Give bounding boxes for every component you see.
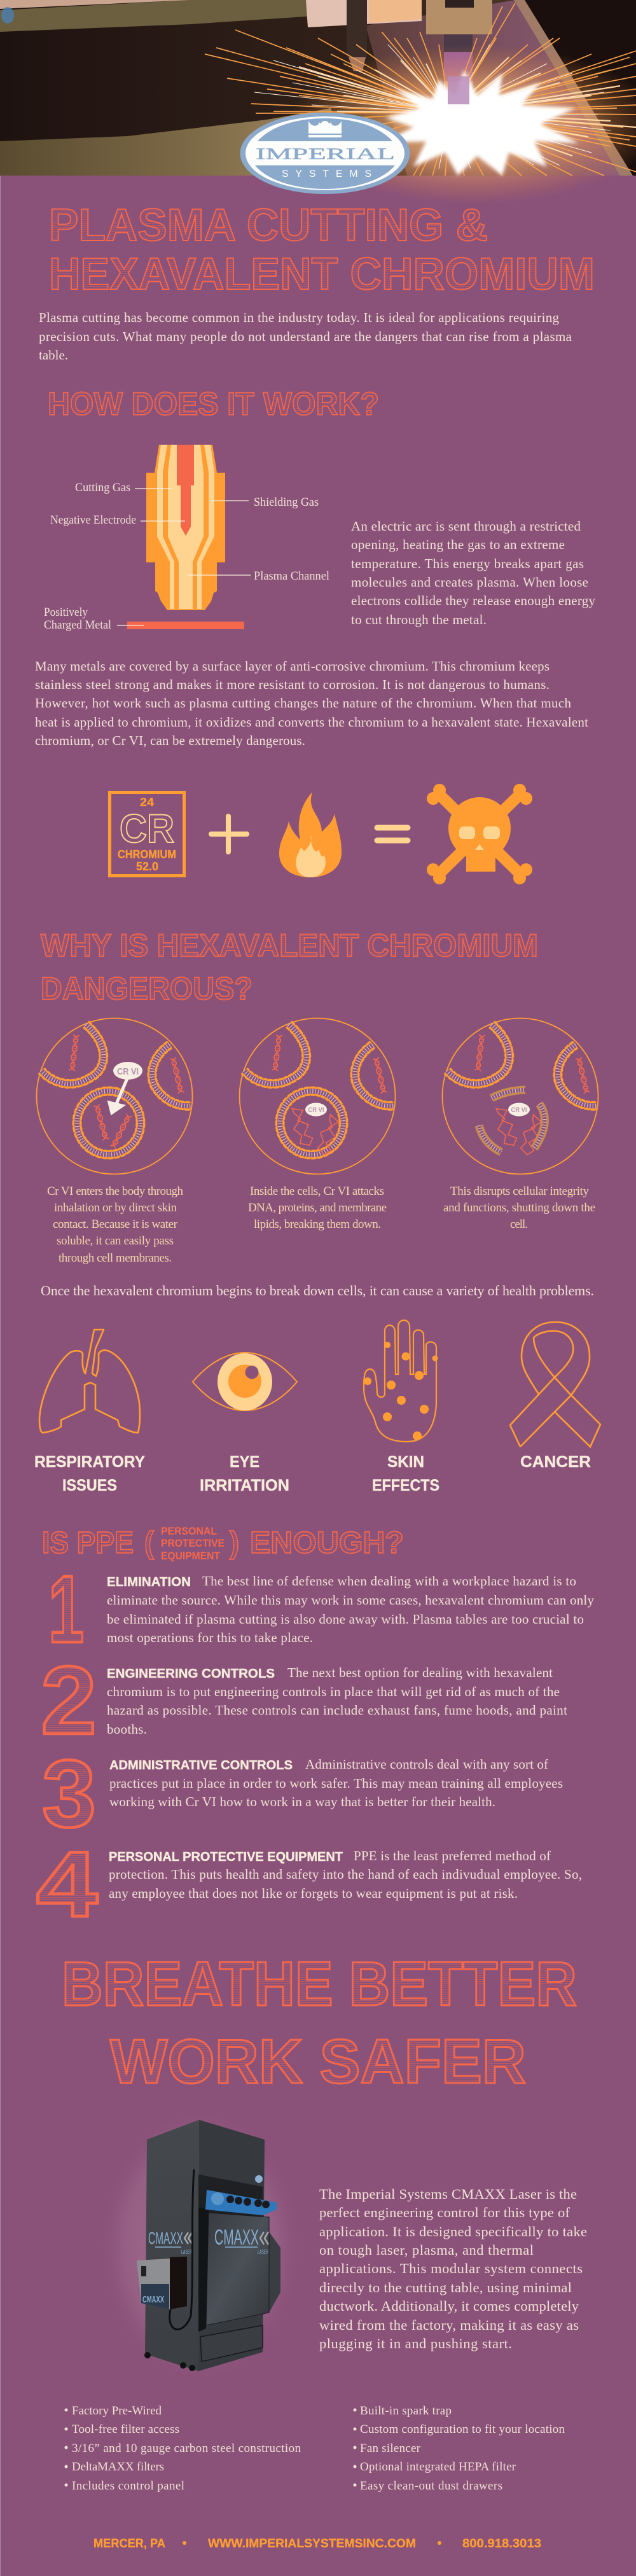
caption: step 3 [443, 1185, 595, 1231]
diagram: Cr VI enters cell [37, 1018, 192, 1174]
text block: personal protective equipment [109, 1848, 582, 1901]
label: respiratory issues: ISSUES [62, 1477, 117, 1494]
Cr VI bubble [113, 1062, 142, 1080]
nozzle labels [44, 481, 329, 632]
label: eye irritation [200, 1453, 289, 1494]
arrow [109, 1077, 128, 1113]
list: features right: Built-in spark trap [360, 2404, 452, 2418]
Cr VI bubble: CR VI [117, 1066, 139, 1077]
text block: CMAXX description: perfect engineering control for this type of [319, 2204, 570, 2220]
icon: chromium periodic table tile: 52.0 [136, 860, 158, 873]
broken membrane fragments [479, 1090, 544, 1152]
text block: intro: precision cuts. What many people do not understand are the dangers that can rise from a plasma [39, 329, 572, 344]
text block: how plasma works: temperature. This energy breaks apart gas [351, 556, 584, 571]
icon: hand with rash [364, 1320, 438, 1442]
text block: CMAXX description: application. It is designed specifically to take [319, 2224, 587, 2239]
text block: chromium: However, hot work such as plasma cutting changes the nature of the chromium. When that much [35, 695, 571, 711]
text block: engineering controls: ENGINEERING CONTROLS [107, 1667, 275, 1681]
Cr VI bubble [508, 1103, 530, 1116]
icon: cancer ribbon [510, 1322, 600, 1447]
headline: breathe better work safer: BREATHE BETTER [62, 1949, 577, 2019]
text block: elimination: be eliminated if plasma cutting is also done away with. Plasma tables are too crucial to [107, 1612, 584, 1627]
heading: is PPE enough: PERSONAL [161, 1525, 217, 1537]
product: CMAXX Laser machine [99, 2109, 302, 2383]
title: PLASMA CUTTING & [49, 200, 488, 251]
electrode [177, 445, 194, 536]
headline: breathe better work safer: WORK SAFER [110, 2026, 526, 2096]
text block: administrative controls: working with Cr VI how to work in a way that is better for their health. [109, 1794, 495, 1809]
text block: personal protective equipment: PPE is the least preferred method of [354, 1848, 551, 1863]
icon: equals [377, 828, 408, 840]
caption: step 1: Cr VI enters the body through [47, 1185, 183, 1198]
number 1: 1 [48, 1556, 84, 1662]
text block: CMAXX description: wired from the factory, making it as easy as [319, 2317, 579, 2333]
nozzle labels: Plasma Channel [254, 569, 329, 583]
heading: is PPE enough: ENOUGH? [250, 1526, 404, 1560]
heading: why dangerous [41, 928, 538, 1006]
title: HEXAVALENT CHROMIUM [49, 249, 595, 300]
label: eye irritation: EYE [230, 1453, 259, 1471]
caption: step 1: soluble, it can easily pass [57, 1234, 174, 1248]
list: features right: Easy clean-out dust drawers [360, 2479, 502, 2493]
text block: CMAXX description [319, 2186, 587, 2351]
text block: engineering controls: hazard as possible. These controls can include exhaust fans, fume hoods, and paint [107, 1702, 567, 1718]
title [49, 200, 595, 300]
text block: elimination: eliminate the source. While this may work in some cases, hexavalent chromium can only [107, 1592, 594, 1608]
list: features left: Tool-free filter access [72, 2423, 179, 2436]
text block: intro: Plasma cutting has become common in the industry today. It is ideal for applications requiring [39, 310, 560, 325]
text block: chromium: heat is applied to chromium, it oxidizes and converts the chromium to a hexavalent state. Hexavalent [35, 714, 588, 730]
text block: elimination [107, 1573, 594, 1645]
nozzle labels: Charged Metal [44, 618, 111, 632]
text block: administrative controls: ADMINISTRATIVE CONTROLS [109, 1758, 293, 1772]
caption: step 3: and functions, shutting down the [443, 1201, 595, 1215]
diagram: cell breaks down [443, 1018, 598, 1174]
caption: step 1: inhalation or by direct skin [54, 1201, 177, 1215]
heading: is PPE enough: ( [144, 1526, 154, 1560]
heading: is PPE enough: ) [230, 1526, 239, 1560]
text block: administrative controls: practices put in place in order to work safer. This may mean training all employees [109, 1776, 563, 1791]
icon: skull and crossbones [427, 784, 532, 884]
panel: left edge line [0, 176, 1, 2576]
text block: engineering controls: booths. [107, 1722, 147, 1737]
footer contact line: 800.918.3013 [462, 2537, 541, 2551]
caption: step 2 [248, 1185, 387, 1231]
text block: how plasma works [351, 519, 595, 627]
icon: chromium periodic table tile: CR [120, 807, 174, 851]
text block: CMAXX description: plugging it in and pushing start. [319, 2336, 512, 2351]
caption: step 1: contact. Because it is water [53, 1218, 178, 1231]
panel: header photo of plasma cutter [0, 0, 636, 204]
text block: chromium: stainless steel strong and makes it more resistant to corrosion. It is not dangerous to humans. [35, 677, 550, 692]
text block: elimination: most operations for this to take place. [107, 1630, 313, 1645]
text block: administrative controls: Administrative controls deal with any sort of [305, 1757, 548, 1772]
label: cancer: CANCER [520, 1453, 591, 1471]
caption: step 3: This disrupts cellular integrity [450, 1185, 589, 1198]
diagram: plasma torch nozzle [44, 445, 329, 632]
heading: why dangerous: WHY IS HEXAVALENT CHROMIUM [41, 928, 538, 963]
text block: intro: table. [39, 347, 68, 363]
Cr VI bubble: CR VI [308, 1106, 324, 1114]
product: CMAXX Laser machine: LASER [181, 2249, 192, 2256]
text block: engineering controls: chromium is to put engineering controls in place that will get rid of as much of the [107, 1684, 560, 1699]
leader lines [117, 489, 251, 625]
list: features left: DeltaMAXX filters [72, 2460, 164, 2474]
footer contact line: WWW.IMPERIALSYSTEMSINC.COM [208, 2537, 416, 2551]
positively charged metal [127, 622, 244, 629]
icon: lungs [39, 1330, 140, 1433]
text block: how plasma works: An electric arc is sent through a restricted [351, 519, 581, 534]
caption: step 2: Inside the cells, Cr VI attacks [250, 1185, 384, 1198]
logo: Imperial Systems [240, 113, 410, 194]
text block: how plasma works: to cut through the metal. [351, 612, 487, 627]
heading: is PPE enough: PROTECTIVE [161, 1537, 225, 1549]
icon: eye [193, 1353, 297, 1410]
list: features right [354, 2404, 565, 2493]
text block: CMAXX description: The Imperial Systems CMAXX Laser is the [319, 2186, 577, 2202]
list: features left: Includes control panel [72, 2479, 184, 2493]
text block: personal protective equipment: any employee that does not like or forgets to wear equipment is put at risk. [109, 1886, 518, 1901]
caption: step 2: DNA, proteins, and membrane [248, 1201, 387, 1215]
caption: step 3: cell. [510, 1218, 528, 1231]
text block: intro [39, 310, 572, 363]
icon: crown [308, 121, 342, 137]
text block: health problems intro: Once the hexavalent chromium begins to break down cells, it can cause a variety of health problems. [41, 1283, 594, 1298]
logo word: Imperial: IMPERIAL [256, 146, 395, 163]
text block: chromium [35, 658, 588, 748]
text block: how plasma works: opening, heating the gas to an extreme [351, 537, 565, 552]
icon: chromium periodic table tile: CHROMIUM [118, 848, 176, 861]
nozzle labels: Shielding Gas [254, 496, 319, 509]
text block: chromium: chromium, or Cr VI, can be extremely dangerous. [35, 733, 305, 748]
heading: is PPE enough: EQUIPMENT [161, 1550, 221, 1562]
number 4: 4 [36, 1832, 98, 1936]
footer contact line: MERCER, PA [93, 2537, 165, 2551]
text block: CMAXX description: ductwork. Additionally, it comes completely [319, 2298, 579, 2314]
text block: elimination: The best line of defense when dealing with a workplace hazard is to [202, 1573, 576, 1589]
number 3: 3 [42, 1740, 96, 1847]
text block: how plasma works: molecules and creates plasma. When loose [351, 574, 588, 590]
text block: elimination: ELIMINATION [107, 1575, 191, 1589]
product: CMAXX Laser machine: CMAXX [142, 2294, 164, 2305]
list: features right: Fan silencer [360, 2442, 421, 2455]
label: skin effects [372, 1453, 439, 1494]
text block: administrative controls [109, 1757, 563, 1809]
heading: is PPE enough: IS PPE [42, 1526, 134, 1560]
Cr VI bubble: CR VI [511, 1106, 527, 1114]
text block: personal protective equipment: PERSONAL PROTECTIVE EQUIPMENT [109, 1850, 343, 1864]
text block: personal protective equipment: protection. This puts health and safety into the hand of each indivudual employee. So, [109, 1867, 582, 1882]
label: eye irritation: IRRITATION [200, 1477, 289, 1494]
icon: flame [279, 792, 342, 877]
nozzle labels: Cutting Gas [75, 481, 130, 494]
nozzle labels: Negative Electrode [50, 513, 136, 527]
list: features right: Optional integrated HEPA filter [360, 2460, 516, 2474]
Cr VI bubble [305, 1103, 327, 1116]
text block: how plasma works: electrons collide they release enough energy [351, 593, 595, 608]
label: respiratory issues: RESPIRATORY [34, 1453, 145, 1471]
heading: why dangerous: DANGEROUS? [41, 971, 252, 1006]
text block: CMAXX description: on tough laser, plasma, and thermal [319, 2242, 534, 2258]
footer contact line [93, 2537, 541, 2551]
label: skin effects: SKIN [387, 1453, 424, 1471]
heading: how does it work: HOW DOES IT WORK? [48, 386, 379, 422]
product: CMAXX Laser machine: LASER [258, 2249, 268, 2256]
headline: breathe better work safer [62, 1949, 577, 2096]
number 2: 2 [41, 1647, 97, 1755]
text block: engineering controls [107, 1665, 567, 1737]
list: features left [65, 2404, 301, 2493]
list: features left: Factory Pre-Wired [72, 2404, 162, 2418]
machine logo text: CMAXX [148, 2229, 183, 2248]
text block: chromium: Many metals are covered by a surface layer of anti-corrosive chromium. This chromium keeps [35, 658, 550, 674]
caption: step 2: lipids, breaking them down. [254, 1218, 381, 1231]
diagram: Cr VI attacks DNA [239, 1018, 396, 1174]
product: CMAXX Laser machine: CMAXX [214, 2225, 259, 2250]
list: features right: Custom configuration to fit your location [360, 2423, 565, 2436]
list: features left: 3/16” and 10 gauge carbon steel construction [72, 2442, 301, 2455]
icon: chromium periodic table tile: 24 [140, 796, 154, 809]
logo word: Systems: SYSTEMS [282, 169, 371, 179]
caption: step 1 [47, 1185, 183, 1265]
text block: CMAXX description: applications. This modular system connects [319, 2260, 583, 2276]
icon: plus [211, 816, 247, 852]
heading: is PPE enough [42, 1525, 404, 1562]
nozzle labels: Positively [44, 606, 88, 619]
label: respiratory issues [34, 1453, 145, 1494]
icon: chromium periodic table tile [109, 793, 184, 875]
label: skin effects: EFFECTS [372, 1477, 439, 1494]
text block: engineering controls: The next best option for dealing with hexavalent [287, 1665, 553, 1680]
caption: step 1: through cell membranes. [59, 1251, 172, 1265]
text block: CMAXX description: directly to the cutting table, using minimal [319, 2280, 572, 2295]
